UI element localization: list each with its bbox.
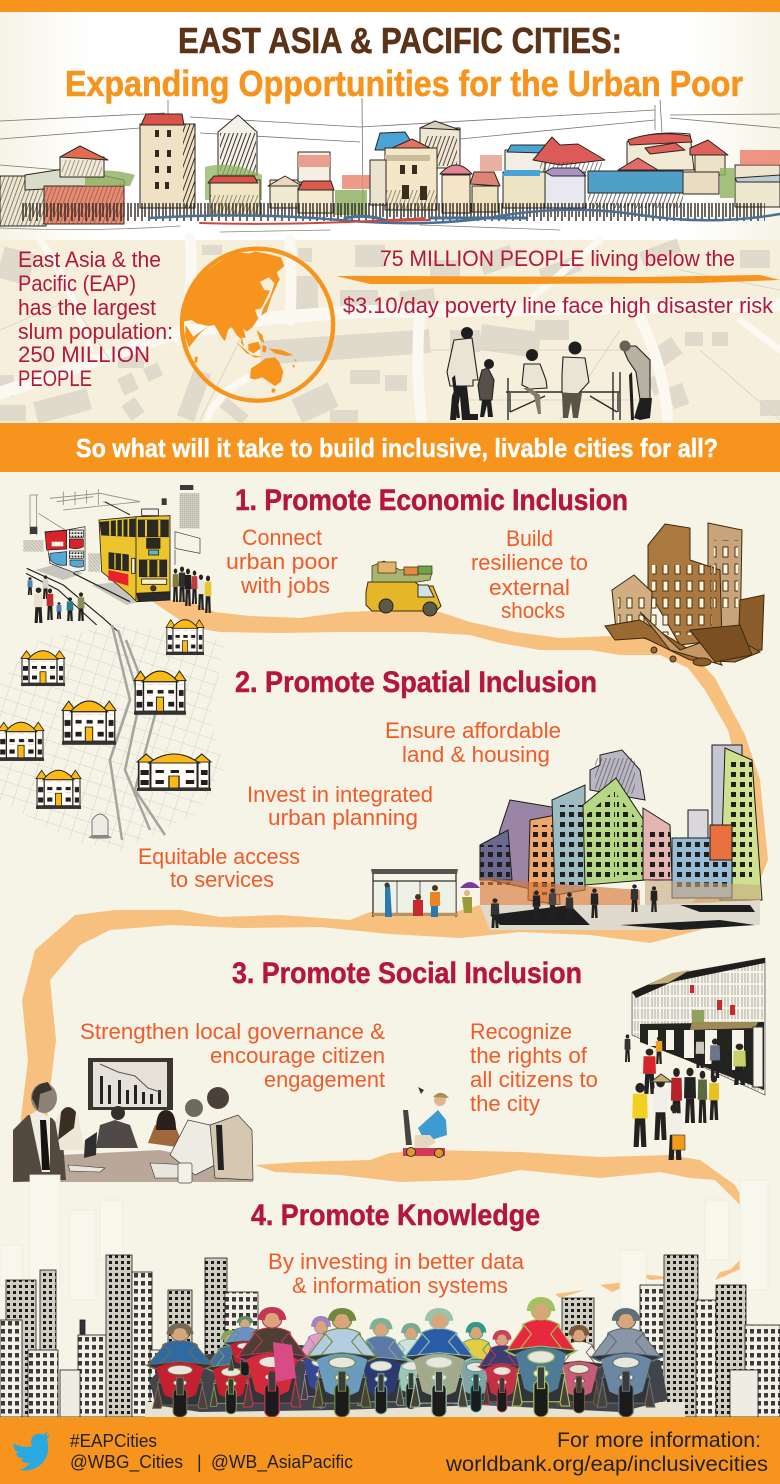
- text: equitable access: [138, 844, 300, 892]
- illustration: sketched waterfront skyline: [0, 98, 780, 232]
- text: better data: & information systems: [292, 1273, 508, 1298]
- text: better data: [268, 1249, 525, 1298]
- panel: statistics over street map: [0, 238, 780, 428]
- text: equitable access: Equitable access: [138, 844, 300, 869]
- left skyline: [0, 1255, 258, 1417]
- church cluster: [370, 121, 500, 213]
- front row riders: [146, 1300, 662, 1417]
- orange brush stroke divider: [336, 275, 780, 284]
- winding road ribbon: [20, 600, 768, 1298]
- icon: tombstone: [88, 814, 112, 838]
- street map background: [0, 238, 780, 428]
- icon: globe of Asia Pacific: [182, 249, 333, 401]
- dark mass of bikes and shadows: [150, 1345, 668, 1412]
- heading: 4. promote knowledge: 4. Promote Knowledge: [251, 1199, 540, 1232]
- text: rights of citizens: the rights of: [470, 1043, 588, 1068]
- text: integrated planning: [247, 782, 433, 830]
- text: local governance: [80, 1019, 385, 1092]
- icon: bus shelter: [371, 869, 480, 917]
- tall tan tower: [140, 114, 195, 208]
- text: affordable land: Ensure affordable: [385, 718, 561, 743]
- text: slum population: [18, 247, 173, 391]
- text: equitable access: to services: [170, 867, 274, 892]
- illustration: sketched city skylines: [0, 1255, 780, 1417]
- icon: vendor truck: [366, 561, 441, 616]
- right skyline: [562, 1255, 780, 1417]
- text: social handles: @WBG_Cities: [70, 1452, 183, 1473]
- left shacks: [0, 146, 135, 226]
- text: social handles: @WB_AsiaPacific: [211, 1452, 353, 1473]
- text: rights of citizens: all citizens to: [470, 1067, 598, 1092]
- text: slum population: PEOPLE: [18, 366, 92, 391]
- heading: 3. social inclusion: 3. Promote Social Inclusion: [232, 957, 582, 990]
- text: integrated planning: urban planning: [268, 805, 418, 830]
- text: more information: For more information:: [557, 1429, 761, 1452]
- text: slum population: East Asia & the: [18, 247, 161, 272]
- text: connect urban poor: Connect: [242, 525, 322, 550]
- question banner: So what will it take to build inclusive, livable cities for all?: [76, 433, 718, 463]
- icon: twitter bird: [11, 1430, 58, 1473]
- illustration: board meeting: [13, 1058, 253, 1183]
- text: local governance: encourage citizen: [210, 1043, 385, 1068]
- title: [65, 20, 743, 104]
- text: affordable land: land & housing: [402, 742, 550, 767]
- illustration: shophouse street with crowd: [624, 958, 765, 1160]
- text: connect urban poor: with jobs: [240, 573, 330, 598]
- text: rights of citizens: the city: [470, 1091, 540, 1116]
- heading: 1. economic inclusion: 1. Promote Economic Inclusion: [235, 484, 628, 517]
- right cluster: [480, 133, 780, 208]
- icon: man on mobility scooter: [403, 1087, 449, 1158]
- illustration: trams and street: [23, 485, 200, 633]
- text: build resilience: shocks: [501, 598, 565, 623]
- text: build resilience: resilience to: [471, 550, 588, 575]
- text: local governance: engagement: [264, 1067, 385, 1092]
- pink cloth on bike: [273, 1342, 296, 1382]
- yellow double-decker tram: [99, 502, 170, 602]
- question banner: [0, 423, 780, 472]
- text: 75 million: 75 MILLION PEOPLE living below the: [380, 246, 735, 271]
- text: connect urban poor: [226, 525, 338, 598]
- text: social handles: |: [197, 1452, 202, 1472]
- text: integrated planning: Invest in integrated: [247, 782, 433, 807]
- middle houses: [205, 152, 372, 215]
- illustration: crowd of motorbike riders: [145, 1300, 685, 1417]
- text: social handles: [70, 1431, 353, 1473]
- text: more information: [445, 1429, 768, 1476]
- text: slum population: has the largest: [18, 295, 156, 320]
- street surface: [145, 1402, 685, 1417]
- civic building icons: [0, 620, 211, 809]
- text: rights of citizens: [470, 1019, 598, 1116]
- sketched grey tower: [218, 115, 257, 175]
- illustration: city map with civic buildings: [0, 620, 225, 850]
- panel: footer: [0, 1417, 780, 1484]
- text: build resilience: external: [489, 575, 570, 600]
- illustration: pale background towers: [0, 1175, 768, 1310]
- chart on wall: [88, 1058, 173, 1110]
- text: build resilience: [471, 526, 588, 623]
- stilts: [20, 203, 765, 221]
- back row riders: [205, 1318, 606, 1414]
- text: more information: worldbank.org/eap/inclusivecities: [445, 1453, 768, 1476]
- small red tram: [45, 527, 85, 572]
- text: build resilience: Build: [506, 526, 553, 551]
- tram passengers: [27, 567, 211, 623]
- text: slum population: Pacific (EAP): [18, 271, 136, 296]
- text: slum population: slum population:: [18, 319, 173, 344]
- text: better data: By investing in better data: [268, 1249, 525, 1274]
- text: rights of citizens: Recognize: [470, 1019, 572, 1044]
- illustration: family waiting on bench: [447, 327, 652, 420]
- text: local governance: Strengthen local governance &: [80, 1019, 385, 1044]
- heading: 2. spatial inclusion: 2. Promote Spatial Inclusion: [235, 666, 597, 699]
- illustration: high-rise street scene: [480, 745, 762, 930]
- text: connect urban poor: urban poor: [226, 549, 338, 574]
- water scribbles: [0, 210, 780, 232]
- panel: header: [0, 0, 780, 240]
- text: social handles: #EAPCities: [70, 1431, 157, 1451]
- title: EAST ASIA & PACIFIC CITIES:: [178, 20, 622, 61]
- text: slum population: 250 MILLION: [18, 342, 150, 367]
- top orange bar: [0, 0, 780, 12]
- text: affordable land: [385, 718, 561, 767]
- text: poverty line: $3.10/day poverty line face high disaster risk: [343, 293, 774, 318]
- illustration: collapsed buildings: [605, 523, 764, 666]
